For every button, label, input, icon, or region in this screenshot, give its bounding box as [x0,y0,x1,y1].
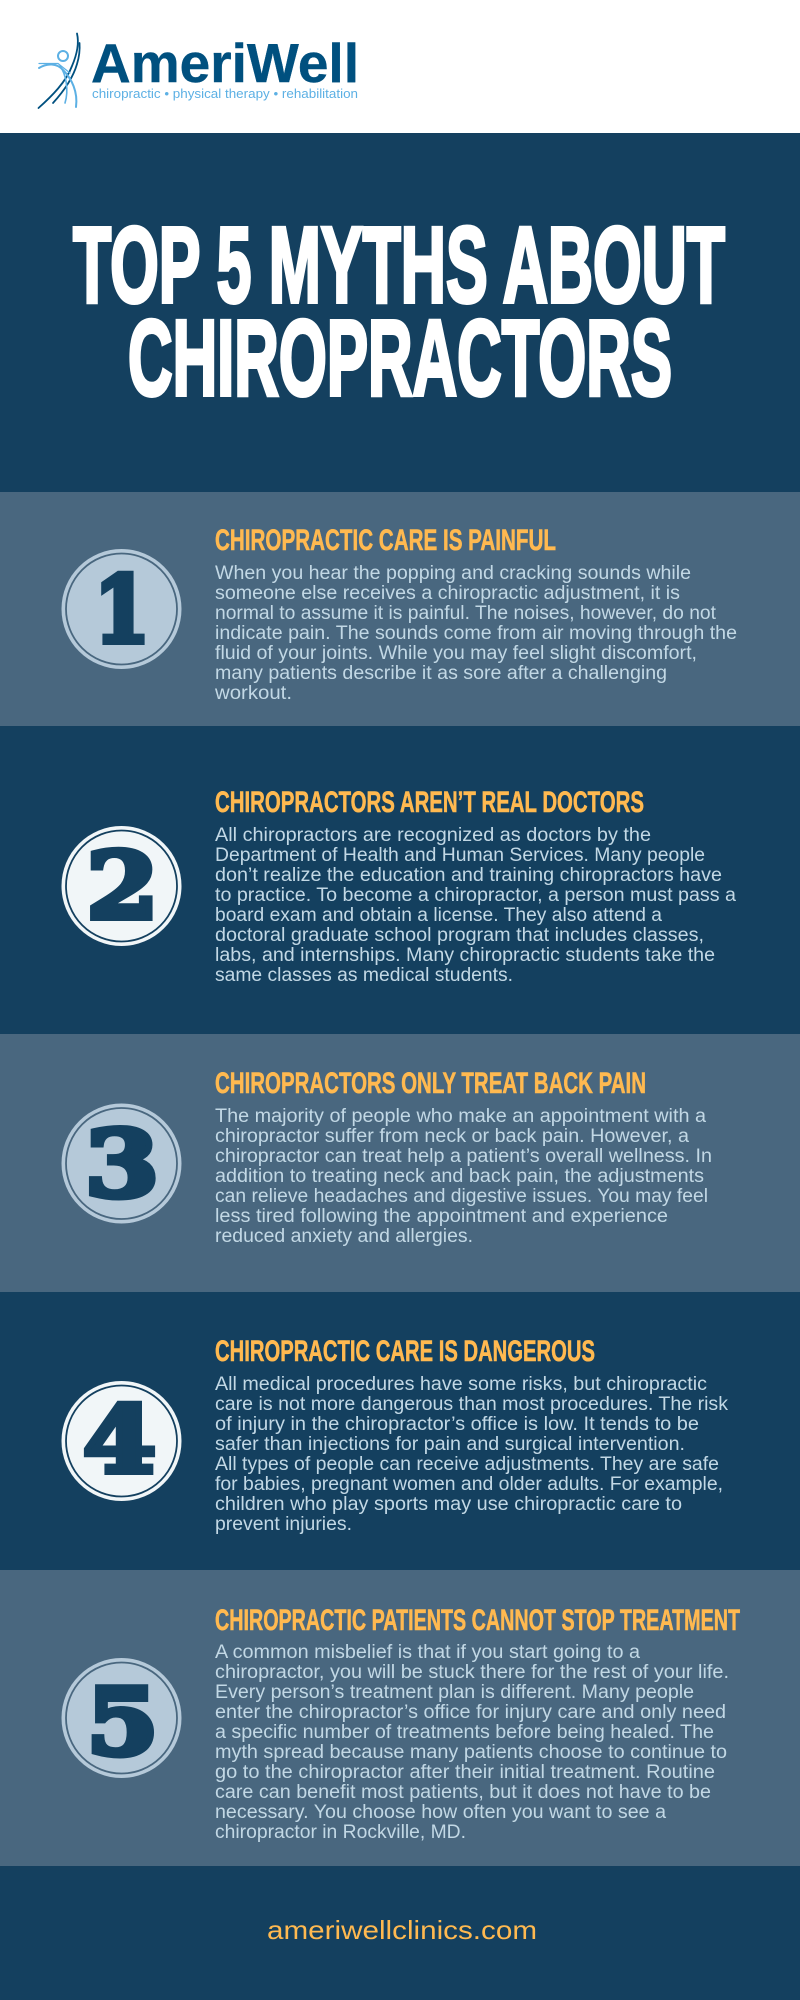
body text: myth 5: necessary. You choose how often you want to see a [215,1802,666,1823]
icon: AmeriWell figure [38,34,80,108]
panel: myth 2 [62,786,736,986]
body text: myth 3: addition to treating neck and back pain, the adjustments [215,1166,704,1187]
body text: myth 2 [215,825,736,986]
body text: myth 4: safer than injections for pain and surgical intervention. [215,1434,685,1455]
number badge 2: 2 [86,832,158,940]
body text: myth 5: Every person’s treatment plan is different. Many people [215,1682,694,1703]
number badge 3 [62,1104,182,1224]
heading: myth 1: CHIROPRACTIC CARE IS PAINFUL [215,524,556,557]
body text: myth 4: care is not more dangerous than most procedures. The risk [215,1394,729,1415]
body text: myth 3: can relieve headaches and digestive issues. You may feel [215,1186,708,1207]
body text: myth 1: workout. [214,683,292,704]
number badge 4: 4 [83,1386,156,1494]
body text: myth 2: labs, and internships. Many chiropractic students take the [215,945,715,966]
body text: myth 3: The majority of people who make an appointment with a [215,1106,706,1127]
panel: myth 5 [0,1570,800,1866]
header: logo band [0,0,800,133]
title [73,204,725,418]
number badge 3: 3 [85,1110,159,1218]
body text: myth 5: go to the chiropractor after their initial treatment. Routine [215,1762,715,1783]
logo wordmark: AmeriWell [91,32,359,94]
logo tagline: chiropractic • physical therapy • rehabilitation [92,86,358,101]
body text: myth 1: normal to assume it is painful. The noises, however, do not [215,603,717,624]
footer: website: ameriwellclinics.com [267,1915,537,1945]
body text: myth 4: for babies, pregnant women and older adults. For example, [215,1474,723,1495]
panel: myth 4 [62,1335,729,1535]
body text: myth 2: same classes as medical students. [215,965,513,986]
body text: myth 3: less tired following the appointment and experience [215,1206,668,1227]
number badge 4 [62,1381,182,1501]
body text: myth 5 [215,1642,729,1843]
body text: myth 5: enter the chiropractor’s office for injury care and only need [215,1702,726,1723]
body text: myth 3: reduced anxiety and allergies. [215,1226,473,1247]
number badge 5 [62,1658,182,1778]
panel: myth 1 [0,492,800,726]
panel: myth 3 [0,1034,800,1292]
number badge 1 [62,549,182,669]
body text: myth 3 [215,1106,712,1247]
number badge 2 [62,826,182,946]
body text: myth 2: Department of Health and Human Services. Many people [215,845,705,866]
number badge 5: 5 [86,1668,158,1776]
body text: myth 1: many patients describe it as sore after a challenging [215,663,667,684]
body text: myth 4 [215,1374,729,1535]
body text: myth 5: chiropractor in Rockville, MD. [215,1822,466,1843]
body text: myth 1: fluid of your joints. While you may feel slight discomfort, [215,643,697,664]
body text: myth 5: A common misbelief is that if you start going to a [215,1642,640,1663]
body text: myth 4: of injury in the chiropractor’s office is low. It tends to be [215,1414,699,1435]
body text: myth 1: When you hear the popping and cracking sounds while [215,563,691,584]
heading: myth 4: CHIROPRACTIC CARE IS DANGEROUS [215,1335,595,1368]
body text: myth 4: children who play sports may use chiropractic care to [215,1494,682,1515]
body text: myth 3: chiropractor can treat help a patient’s overall wellness. In [215,1146,712,1167]
body text: myth 2: to practice. To become a chiropractor, a person must pass a [215,885,736,906]
body text: myth 5: myth spread because many patients choose to continue to [215,1742,727,1763]
body text: myth 1: indicate pain. The sounds come from air moving through the [215,623,737,644]
body text: myth 2: All chiropractors are recognized as doctors by the [215,825,651,846]
body text: myth 4: All medical procedures have some risks, but chiropractic [215,1374,707,1395]
body text: myth 2: board exam and obtain a license. They also attend a [215,905,662,926]
body text: myth 2: don’t realize the education and training chiropractors have [215,865,722,886]
number badge 1: 1 [94,556,150,664]
body text: myth 1 [214,563,737,704]
body text: myth 5: chiropractor, you will be stuck there for the rest of your life. [215,1662,729,1683]
body text: myth 5: a specific number of treatments before being healed. The [215,1722,714,1743]
body text: myth 2: doctoral graduate school program that includes classes, [215,925,704,946]
body text: myth 1: someone else receives a chiropractic adjustment, it is [215,583,680,604]
body text: myth 4: All types of people can receive adjustments. They are safe [215,1454,719,1475]
body text: myth 3: chiropractor suffer from neck or back pain. However, a [215,1126,689,1147]
body text: myth 4: prevent injuries. [215,1514,352,1535]
body text: myth 5: care can benefit most patients, but it does not have to be [215,1782,711,1803]
